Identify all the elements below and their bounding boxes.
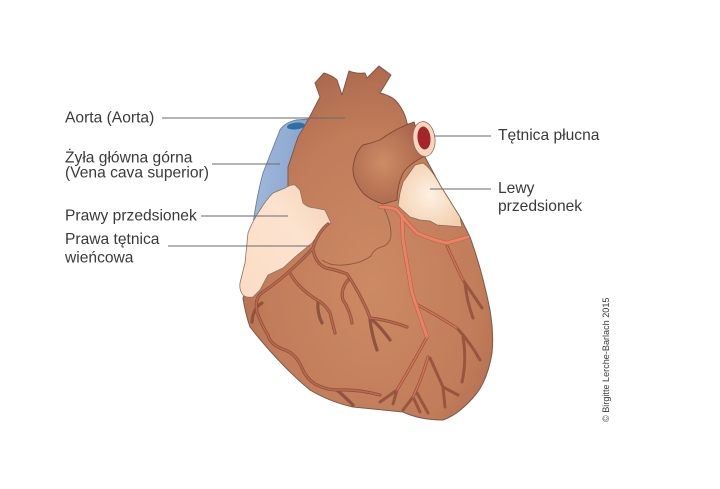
label: superior vena cava: (Vena cava superior) xyxy=(65,164,209,182)
right coronary artery xyxy=(252,224,407,405)
label: right coronary artery: wieńcowa xyxy=(64,250,134,266)
superior vena cava xyxy=(253,119,310,224)
lower chamber outline xyxy=(322,205,391,265)
pulmonary artery opening xyxy=(411,120,437,158)
label: Aorta: Aorta (Aorta) xyxy=(65,110,154,126)
label: left atrium: Lewy xyxy=(498,180,535,197)
label: right coronary artery: Prawa tętnica xyxy=(65,231,160,248)
label: left atrium: przedsionek xyxy=(498,198,582,215)
label: superior vena cava xyxy=(65,148,280,182)
label: right atrium: Prawy przedsionek xyxy=(65,208,197,224)
left coronary artery xyxy=(380,207,482,413)
label: pulmonary artery: Tętnica płucna xyxy=(498,127,600,144)
label: superior vena cava: Żyła główna górna xyxy=(65,148,193,166)
heart body xyxy=(243,66,493,420)
pulmonary trunk xyxy=(353,122,425,204)
label: left atrium xyxy=(430,180,582,215)
right atrium xyxy=(240,185,331,297)
left atrium xyxy=(398,163,462,227)
copyright note: © Birgitte Lerche-Barlach 2015 xyxy=(601,298,611,422)
label: right coronary artery xyxy=(64,231,310,266)
heart illustration xyxy=(240,66,493,420)
